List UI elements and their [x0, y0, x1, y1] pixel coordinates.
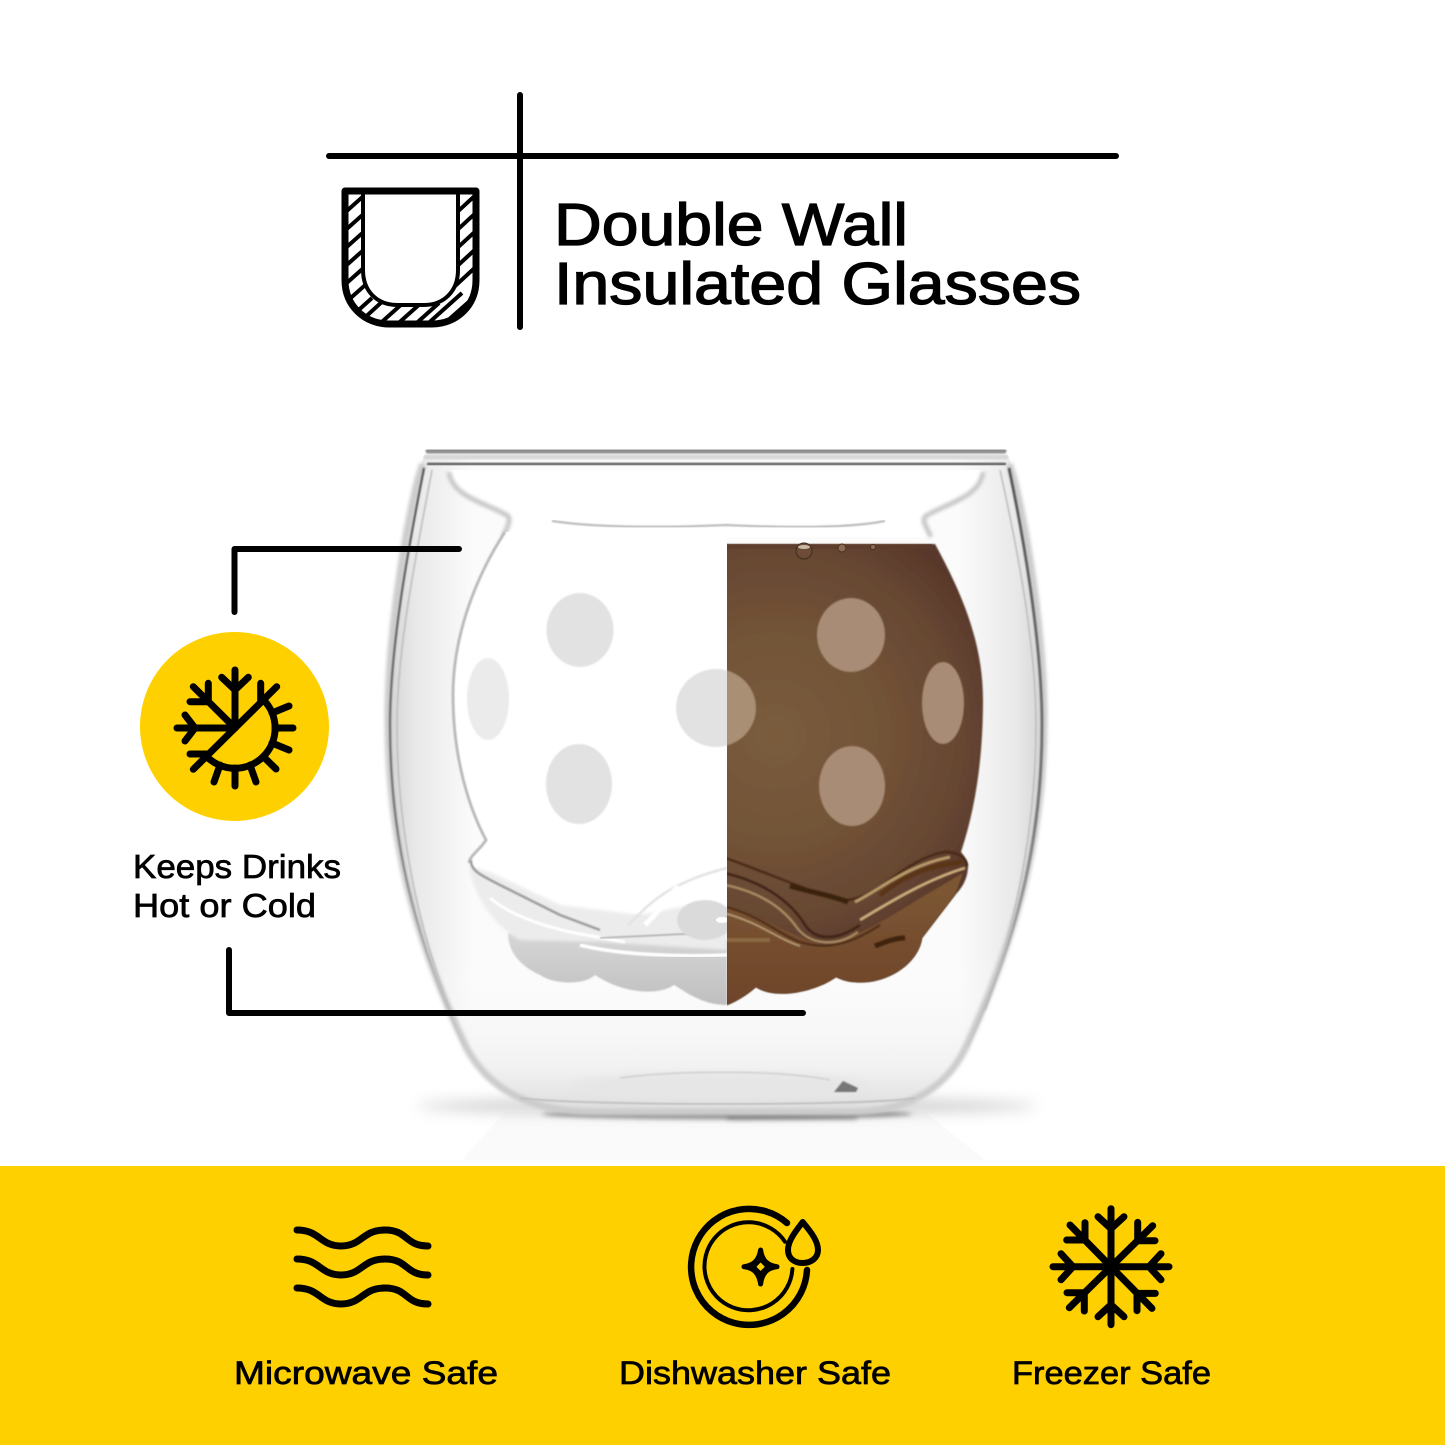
floor shadow and reflection — [417, 1098, 1037, 1160]
outer glass wall — [388, 458, 1044, 1112]
heading — [554, 192, 1081, 317]
inner bulb: tea-filled right half — [727, 542, 984, 1006]
tea band highlight and bubbles — [720, 543, 932, 559]
icon: double wall cup cross-section — [340, 191, 480, 330]
callout label: Keeps Drinks — [133, 848, 341, 885]
freezer safe feature — [1012, 1209, 1211, 1391]
heading: Insulated Glasses — [554, 251, 1081, 317]
flange and neck — [449, 470, 983, 537]
callout label — [133, 848, 341, 924]
label: Microwave Safe — [234, 1355, 498, 1391]
connector lower — [229, 950, 803, 1013]
glass product illustration — [388, 451, 1044, 1160]
polka dots, right — [727, 597, 965, 827]
microwave safe feature — [234, 1230, 498, 1391]
dishwasher safe feature — [619, 1209, 891, 1391]
icon: hot and cold badge — [140, 632, 329, 821]
bottom feature band — [0, 1166, 1445, 1445]
inner bulb: clear left half — [453, 532, 756, 1005]
wavy foot highlights — [720, 852, 967, 946]
connector upper — [234, 549, 459, 612]
heading: Double Wall — [554, 192, 908, 258]
header rule lines — [329, 95, 1116, 327]
label: Dishwasher Safe — [619, 1355, 891, 1391]
callout: keeps drinks hot or cold — [133, 549, 803, 1013]
icon: waves — [297, 1230, 428, 1304]
glass rim — [426, 451, 1006, 464]
label: Freezer Safe — [1012, 1355, 1211, 1391]
header: double wall insulated glasses — [329, 95, 1116, 330]
icon: snowflake — [1053, 1209, 1169, 1325]
icon: plate, sparkle and drop — [691, 1209, 818, 1325]
foot, left half — [469, 860, 733, 1005]
polka dots, left — [467, 593, 756, 824]
callout label: Hot or Cold — [133, 887, 316, 924]
